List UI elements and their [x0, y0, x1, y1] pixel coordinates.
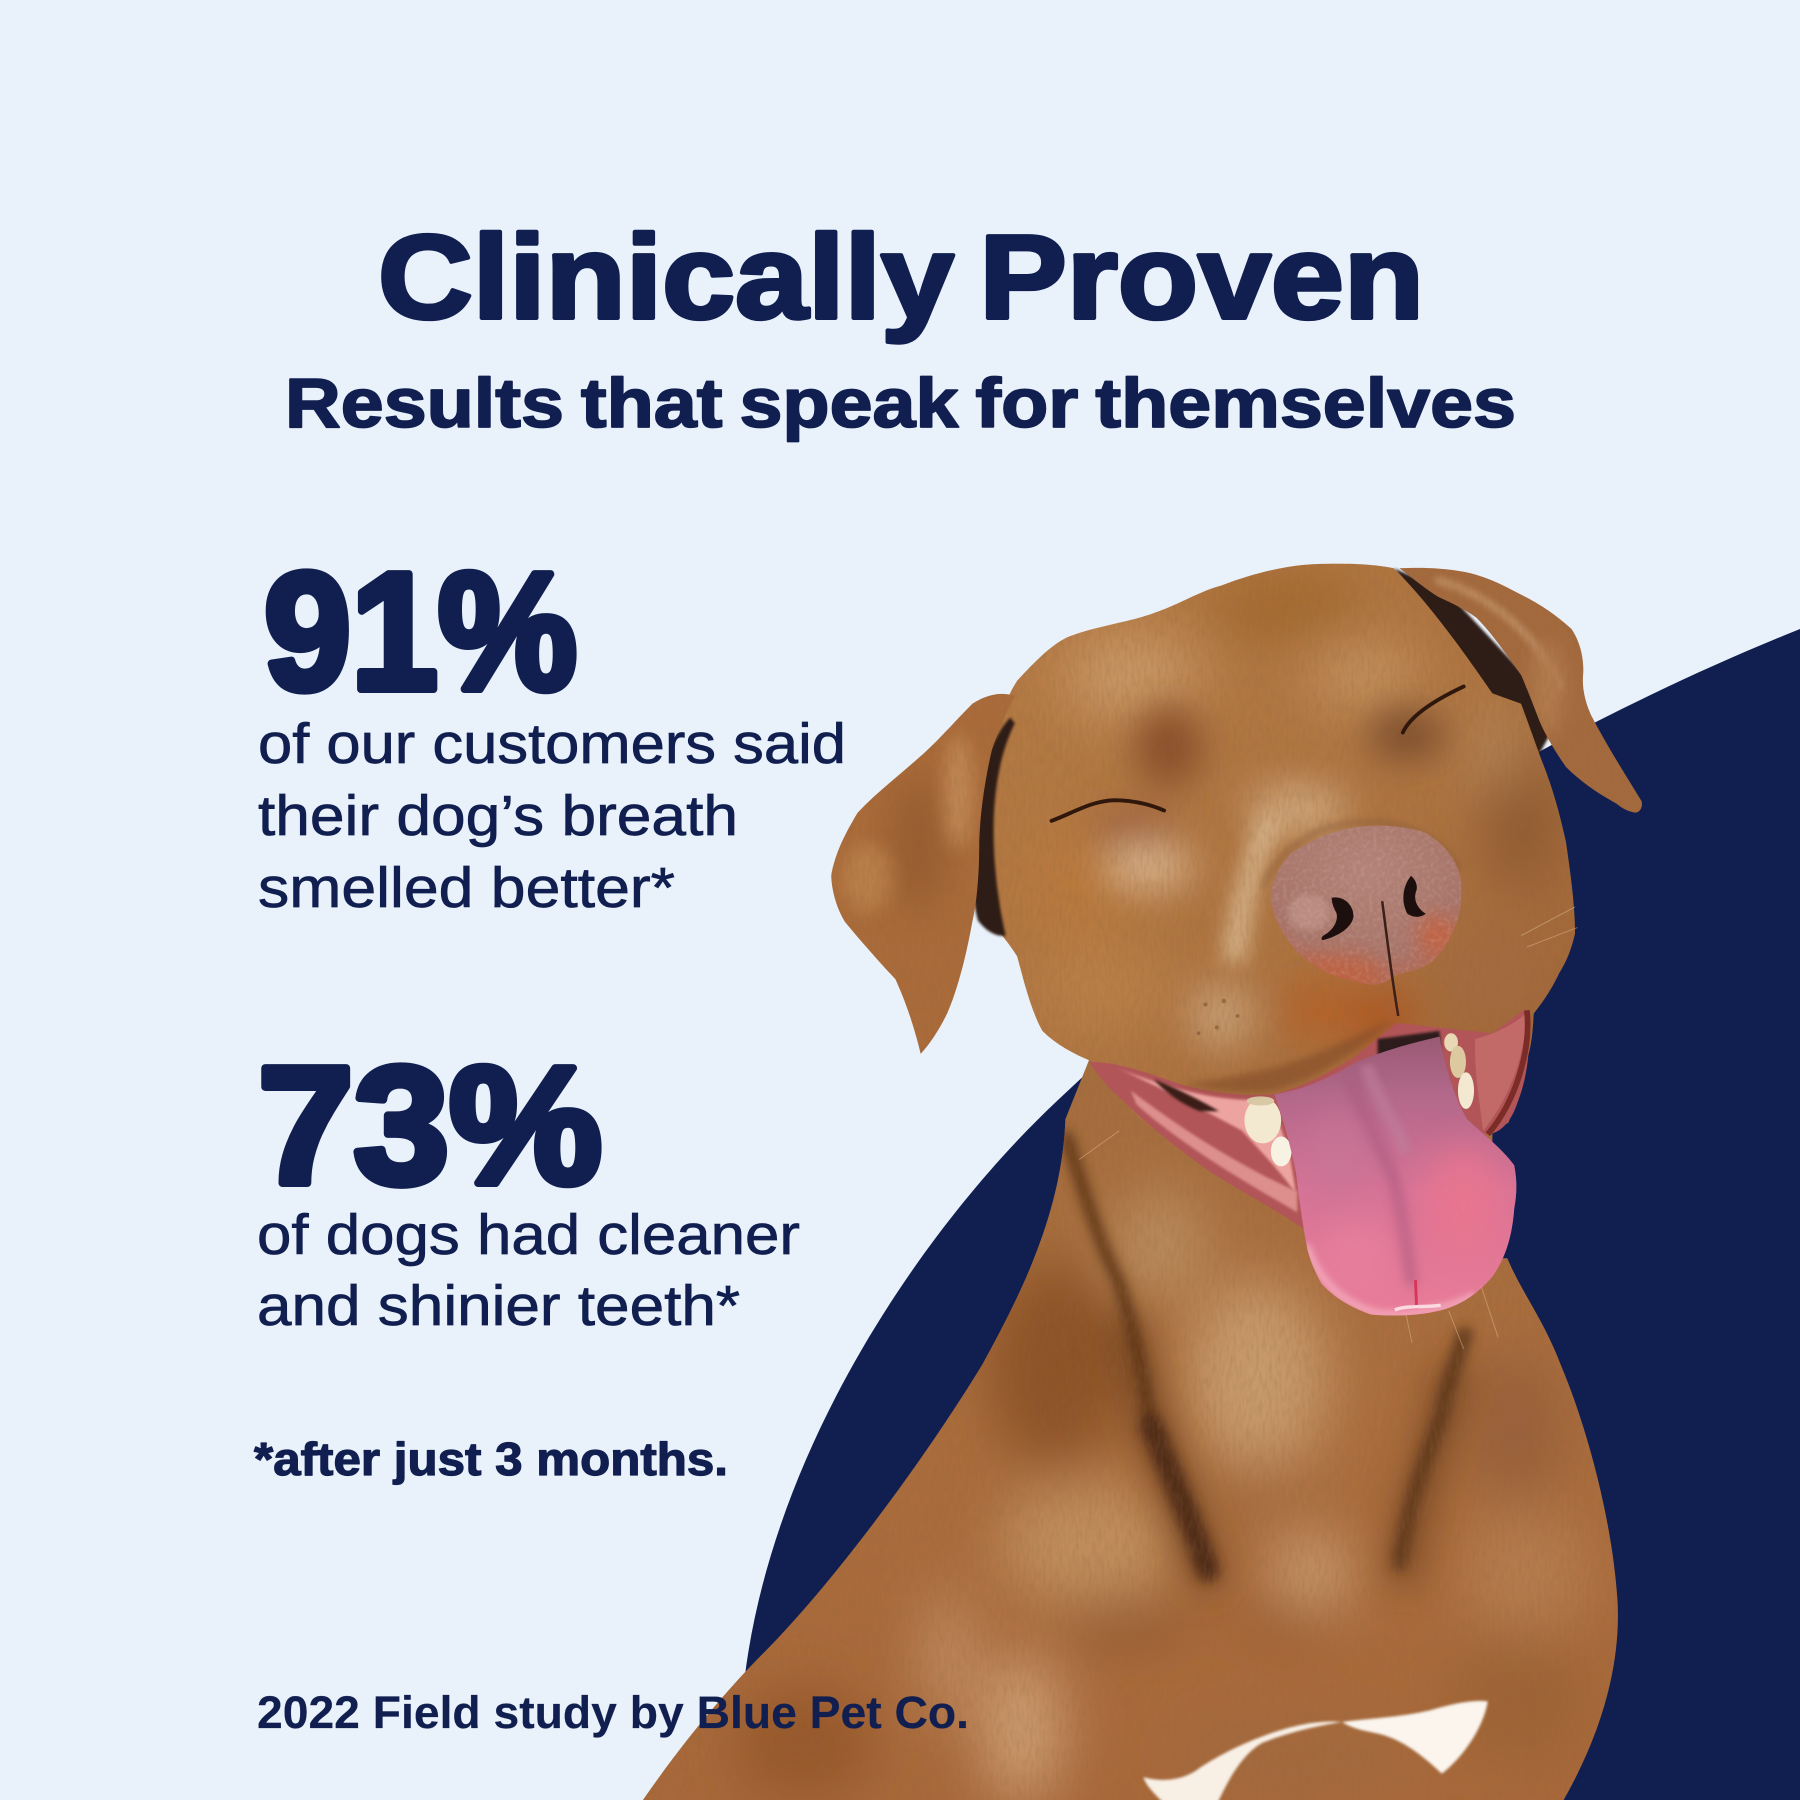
- dog mouth interior: [1089, 1009, 1529, 1228]
- white chest patch: [1143, 1701, 1488, 1800]
- dog neck and chest: [620, 1033, 1653, 1800]
- muzzle fold above nose: [1263, 822, 1460, 890]
- dog teeth: [1244, 1033, 1474, 1166]
- dog tongue: [1274, 1036, 1516, 1316]
- dog upper lip shading: [1182, 1019, 1396, 1092]
- footnote: *after just 3 months.: [254, 1433, 728, 1485]
- stat: 91 percent: [258, 539, 846, 920]
- dog eyes: [1052, 687, 1464, 821]
- dog photo illustration: [620, 551, 1653, 1800]
- dog nose: [1263, 821, 1469, 1016]
- left ear crease: [973, 718, 1015, 936]
- navy curved panel: [745, 629, 1800, 1800]
- soft halos beside the neck creases: [1125, 1332, 1453, 1573]
- stat description: [258, 712, 846, 920]
- stat description: smelled better*: [258, 856, 675, 920]
- nostrils: [1322, 876, 1426, 940]
- dog head: [992, 564, 1575, 1124]
- dog whiskers: [1079, 907, 1577, 1349]
- subtitle: Results that speak for themselves: [285, 364, 1516, 442]
- title: Clinically Proven: [378, 211, 1424, 344]
- footer source line: 2022 Field study by Blue Pet Co.: [257, 1687, 969, 1738]
- stat description: of dogs had cleaner: [257, 1203, 800, 1267]
- stat description: of our customers said: [258, 712, 846, 776]
- dog right ear: [1400, 568, 1642, 813]
- stat description: [257, 1203, 800, 1338]
- stat number 73%: 73%: [258, 1033, 602, 1219]
- stat description: and shinier teeth*: [257, 1274, 740, 1338]
- dog right ear shadow: [1394, 568, 1550, 760]
- stat: 73 percent: [257, 1033, 800, 1338]
- stat description: their dog’s breath: [258, 784, 738, 848]
- stat number 91%: 91%: [264, 539, 577, 725]
- dog left ear: [831, 694, 1014, 1054]
